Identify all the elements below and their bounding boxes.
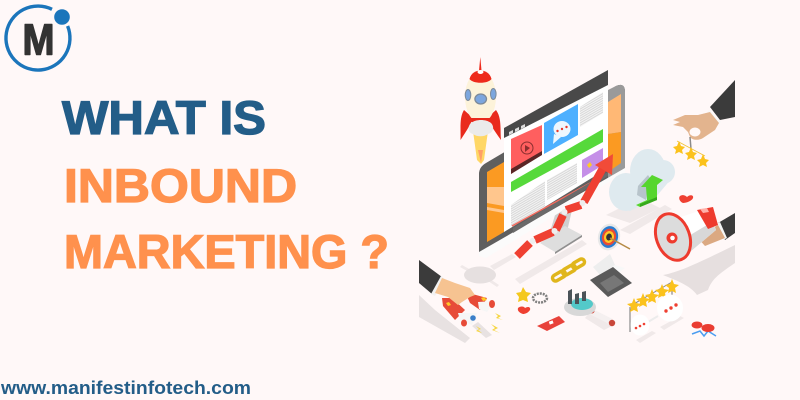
cloud upload icon bbox=[609, 149, 675, 211]
logo: Manifest Infotech: M bbox=[22, 16, 54, 64]
isometric illustration bbox=[419, 57, 735, 343]
chain link bbox=[551, 258, 586, 282]
orange screen left bbox=[487, 162, 504, 242]
red video card bbox=[511, 125, 542, 174]
heart floating bbox=[679, 195, 693, 203]
orange screen right bbox=[608, 94, 621, 134]
rocket bbox=[460, 57, 501, 164]
red hearts and blue ribbon bbox=[692, 322, 716, 336]
megaphone with hand bbox=[649, 207, 735, 265]
purple card bbox=[582, 148, 603, 178]
hand with magnet bbox=[419, 260, 503, 333]
monitor bbox=[479, 70, 625, 258]
blue chat card bbox=[544, 104, 578, 154]
growth arrow bbox=[517, 154, 613, 256]
star, gear, heart and card icons bbox=[516, 287, 565, 331]
title: WHAT IS: WHAT IS bbox=[62, 91, 266, 144]
text block top right bbox=[580, 92, 603, 127]
text blocks bottom bbox=[511, 181, 545, 226]
magnifier with bar chart bbox=[564, 289, 615, 326]
ground shadows bbox=[419, 198, 735, 343]
review stars and chat bubbles bbox=[627, 279, 683, 336]
logo: Manifest Infotech bbox=[6, 6, 70, 70]
title: INBOUND: INBOUND bbox=[64, 159, 297, 212]
browser window bbox=[504, 70, 608, 232]
title: MARKETING ?: MARKETING ? bbox=[64, 225, 389, 278]
monitor frame bbox=[479, 85, 625, 252]
hand holding rating stars bbox=[673, 80, 735, 167]
typewriter bbox=[590, 254, 632, 297]
target with arrow bbox=[595, 221, 630, 253]
green band bbox=[511, 129, 603, 192]
monitor stand bbox=[550, 205, 572, 236]
website address: www.manifestinfotech.com bbox=[0, 377, 251, 398]
